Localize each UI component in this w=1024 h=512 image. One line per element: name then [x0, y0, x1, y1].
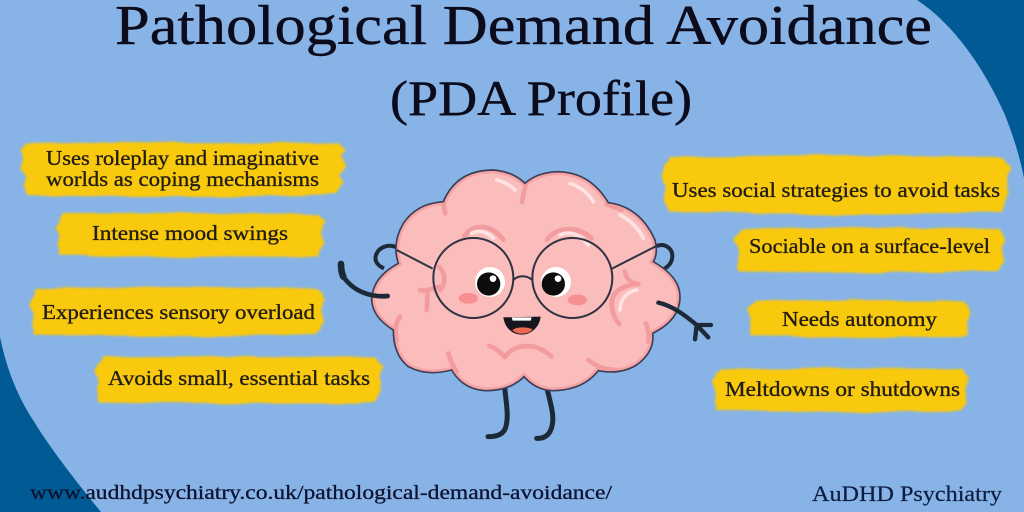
callout: roleplay: worlds as coping mechanisms — [46, 167, 319, 191]
callout: sociable — [733, 227, 1005, 273]
callout: sensory overload: Experiences sensory overload — [42, 300, 316, 324]
subtitle: (PDA Profile) — [390, 70, 692, 126]
corner shape: top right — [917, 0, 1024, 178]
brain highlights — [472, 180, 643, 310]
eyes — [475, 267, 571, 297]
brain inner rim — [372, 170, 680, 391]
brain folds — [396, 187, 649, 372]
right arm — [658, 303, 711, 339]
corner shape: bottom left — [0, 337, 101, 512]
callout: social strategies — [660, 155, 1011, 215]
callout: social strategies: Uses social strategies to avoid tasks — [672, 178, 1000, 202]
brain character — [341, 170, 711, 438]
ear loops — [376, 245, 672, 269]
callout: autonomy — [747, 300, 970, 338]
callout: roleplay — [20, 142, 346, 197]
brand name: AuDHD Psychiatry — [812, 481, 1002, 506]
callout: mood swings — [55, 213, 325, 257]
brain outline — [372, 170, 680, 391]
callout: sociable: Sociable on a surface-level — [749, 234, 990, 258]
callout: essential tasks — [95, 356, 383, 404]
callout: meltdowns: Meltdowns or shutdowns — [725, 377, 960, 401]
callout: meltdowns — [712, 368, 968, 413]
callout: autonomy: Needs autonomy — [782, 307, 938, 331]
website url: www.audhdpsychiatry.co.uk/pathological-demand-avoidance/ — [30, 482, 612, 504]
brain fill — [372, 170, 680, 391]
callout: sensory overload — [29, 287, 325, 337]
legs — [488, 387, 553, 438]
glasses — [397, 238, 658, 318]
callout: roleplay: Uses roleplay and imaginative — [46, 146, 319, 170]
left arm — [341, 264, 388, 296]
cheeks — [459, 293, 587, 305]
callout: mood swings: Intense mood swings — [92, 221, 288, 245]
mouth — [503, 317, 541, 335]
callout: essential tasks: Avoids small, essential tasks — [108, 366, 370, 390]
